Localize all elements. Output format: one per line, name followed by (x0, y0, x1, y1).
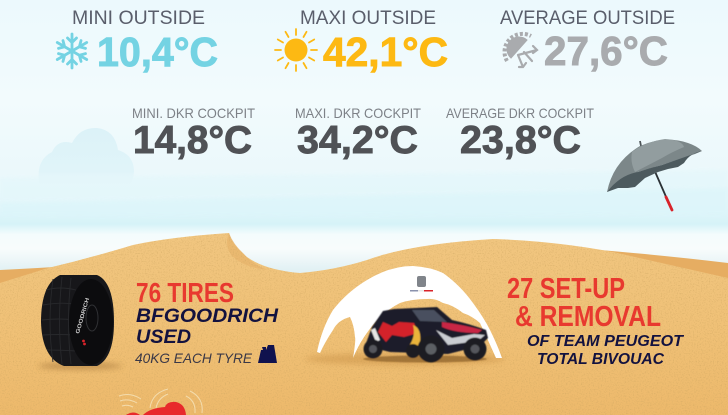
bivouac stats text: TOTAL BIVOUAC (537, 351, 665, 368)
value: 14,8°C: 14,8°C (133, 119, 252, 162)
tyre (38, 275, 122, 370)
icon: weights (258, 345, 277, 363)
tyre stats text: BFGOODRICH (136, 305, 279, 327)
car wheels (364, 336, 486, 362)
value: 10,4°C: 10,4°C (97, 29, 218, 75)
value: 23,8°C: 23,8°C (460, 119, 581, 162)
heading: mini outside (72, 8, 218, 75)
bottom red icon with signal waves (119, 389, 202, 415)
peugeot logo (410, 276, 433, 292)
value: 42,1°C: 42,1°C (323, 29, 448, 75)
rally car (363, 307, 488, 362)
bivouac arch tent (305, 266, 505, 365)
tyre stats text (135, 277, 279, 366)
value: 34,2°C: 34,2°C (297, 119, 418, 162)
bivouac stats text (507, 273, 685, 368)
heading: mini outside: MINI OUTSIDE (72, 8, 205, 29)
heading: average outside: AVERAGE OUTSIDE (500, 8, 675, 29)
label: maxi DKR cockpit (295, 105, 421, 162)
back dunes (0, 250, 728, 300)
label: average DKR cockpit: AVERAGE DKR COCKPIT (446, 105, 594, 121)
tyre stats text: USED (136, 326, 191, 348)
icon: snowflake (55, 34, 89, 68)
bivouac stats text: 27 SET-UP (507, 273, 625, 305)
label: mini DKR cockpit: MINI. DKR COCKPIT (132, 105, 255, 121)
label: mini DKR cockpit (132, 105, 255, 162)
icon: half sun half snowflake (505, 34, 537, 67)
icon: sun (275, 29, 317, 71)
value: 27,6°C: 27,6°C (544, 28, 668, 74)
icon: umbrella (607, 139, 702, 210)
heading: maxi outside (300, 8, 448, 75)
cloud (39, 128, 134, 190)
heading: average outside (500, 8, 675, 74)
label: average DKR cockpit (446, 105, 594, 162)
tyre stats text: 40KG EACH TYRE (135, 350, 253, 366)
main sand dune (0, 230, 728, 415)
tyre stats text: 76 TIRES (136, 277, 234, 308)
heading: maxi outside: MAXI OUTSIDE (300, 8, 436, 29)
bivouac stats text: OF TEAM PEUGEOT (527, 333, 685, 350)
tyre brand text: GOODRICH (75, 297, 91, 335)
bivouac stats text: & REMOVAL (515, 301, 661, 333)
label: maxi DKR cockpit: MAXI. DKR COCKPIT (295, 105, 421, 121)
tyre tread (42, 277, 76, 364)
